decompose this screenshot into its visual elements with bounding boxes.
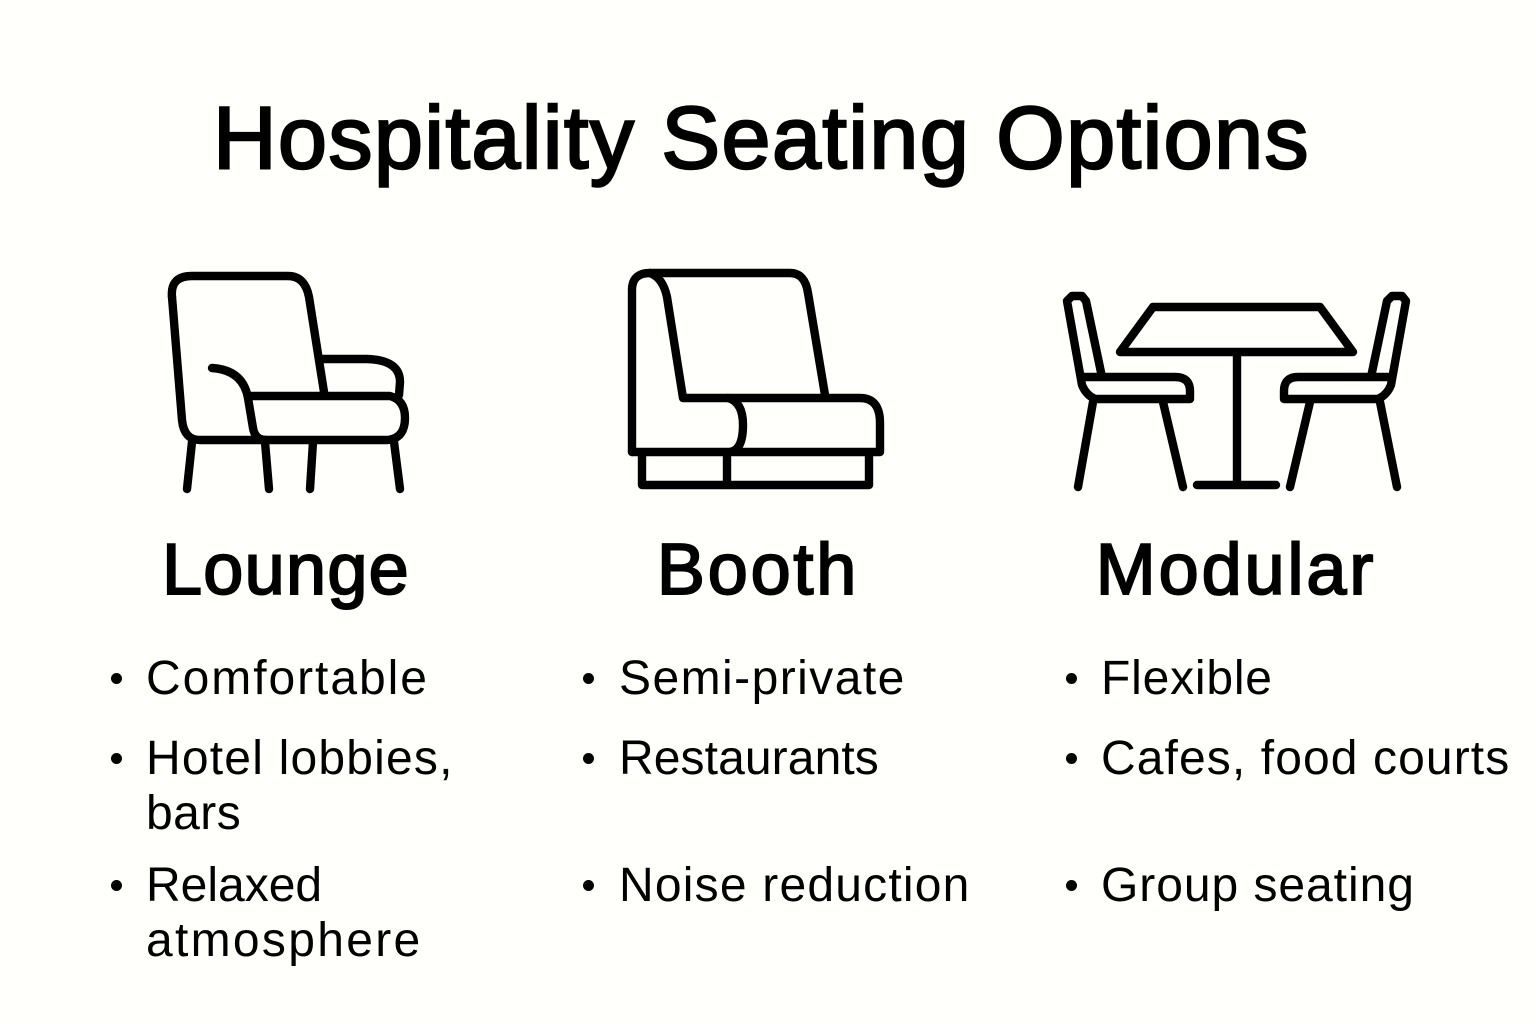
list: lounge: Hotel lobbies, [146,732,454,785]
heading: Lounge: Lounge [162,530,410,610]
list: modular: Group seating [1101,859,1415,912]
list: modular [1066,652,1510,912]
list: modular: Cafes, food courts [1101,732,1510,785]
list: lounge: Comfortable [146,652,429,705]
list: lounge: Relaxed [146,859,322,912]
list: lounge: atmosphere [146,914,422,967]
list: lounge: bars [146,787,241,840]
list: booth: Restaurants [619,732,879,785]
list: booth [583,652,971,912]
heading: Modular: Modular [1096,530,1376,610]
list: booth: Semi-private [619,652,906,705]
list: lounge [111,652,454,967]
heading: Booth: Booth [657,530,859,610]
list: modular: Flexible [1101,652,1273,705]
list: booth: Noise reduction [619,859,971,912]
title: Hospitality Seating Options [213,88,1310,187]
